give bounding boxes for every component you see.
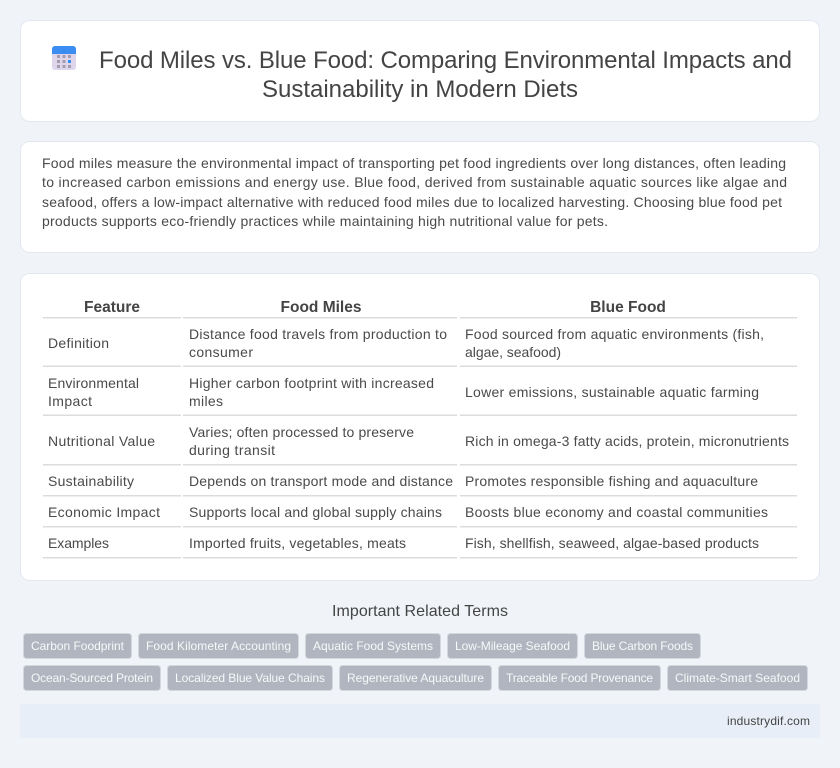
row: sustainability: Sustainability: [48, 473, 134, 489]
row: economic impact: [48, 504, 768, 520]
row: environmental impact: Higher carbon footprint with increased: [189, 375, 434, 391]
row: nutritional value: [48, 424, 789, 458]
row: definition: Food sourced from aquatic environments (fish,: [465, 326, 764, 342]
row: environmental impact: Impact: [48, 393, 92, 409]
tag list: related terms: [24, 634, 808, 690]
row: examples: Imported fruits, vegetables, meats: [189, 535, 406, 551]
tag list: related terms: Ocean-Sourced Protein: [31, 671, 153, 685]
panel: title header: [20, 20, 820, 122]
tag list: related terms: Localized Blue Value Chains: [175, 671, 325, 685]
row: nutritional value: Nutritional Value: [48, 433, 155, 449]
row: environmental impact: [48, 375, 759, 409]
row: nutritional value: during transit: [189, 442, 275, 458]
text block: introduction: to increased carbon emissions and energy use. Blue food, derived from sustainable aquatic sources like algae and: [42, 174, 787, 190]
icon: calendar: [52, 46, 76, 70]
tag list: related terms: Regenerative Aquaculture: [347, 671, 484, 685]
text block: introduction: products supports eco-friendly practices while maintaining high nutritional value for pets.: [42, 213, 608, 229]
tag list: related terms: Climate-Smart Seafood: [675, 671, 800, 685]
row: economic impact: Boosts blue economy and coastal communities: [465, 504, 768, 520]
tag list: related terms: Blue Carbon Foods: [592, 639, 693, 653]
row: environmental impact: Lower emissions, sustainable aquatic farming: [465, 384, 759, 400]
footer bar: [20, 704, 820, 738]
panel: comparison table: [20, 274, 820, 580]
tag list: related terms: Food Kilometer Accounting: [146, 639, 291, 653]
tag list: related terms: Traceable Food Provenance: [506, 671, 653, 685]
row: definition: algae, seafood): [465, 344, 561, 360]
row: examples: [48, 535, 759, 551]
row: definition: Distance food travels from production to: [189, 326, 447, 342]
tag list: related terms: Aquatic Food Systems: [313, 639, 433, 653]
tag list: related terms: Carbon Foodprint: [31, 639, 125, 653]
row: examples: Fish, shellfish, seaweed, algae-based products: [465, 535, 759, 551]
table header: Feature: [84, 299, 140, 316]
panel: introduction: [20, 142, 820, 252]
row: environmental impact: miles: [189, 393, 223, 409]
row: economic impact: Supports local and global supply chains: [189, 504, 442, 520]
table header: [84, 299, 666, 316]
text block: introduction: seafood, offers a low-impact alternative with reduced food miles due to localized harvesting. Choosing blue food pet: [42, 194, 782, 210]
table header: Blue Food: [590, 299, 666, 316]
row: definition: Definition: [48, 335, 109, 351]
title: Food Miles vs. Blue Food: Comparing Environmental Impacts and: [99, 47, 792, 74]
row: definition: consumer: [189, 344, 253, 360]
row: economic impact: Economic Impact: [48, 504, 160, 520]
row: sustainability: [48, 473, 758, 489]
text block: introduction: Food miles measure the environmental impact of transporting pet food ingredients over long distances, often leading: [42, 155, 786, 171]
title: Sustainability in Modern Diets: [262, 76, 578, 103]
row: sustainability: Depends on transport mode and distance: [189, 473, 453, 489]
row: sustainability: Promotes responsible fishing and aquaculture: [465, 473, 758, 489]
row: definition: [48, 326, 764, 360]
heading: related terms: Important Related Terms: [332, 603, 508, 620]
table header: Food Miles: [281, 299, 361, 316]
footer bar: industrydif.com: [727, 714, 810, 728]
row: examples: Examples: [48, 535, 109, 551]
tag list: related terms: Low-Mileage Seafood: [455, 639, 570, 653]
row: nutritional value: Varies; often processed to preserve: [189, 424, 414, 440]
row: nutritional value: Rich in omega-3 fatty acids, protein, micronutrients: [465, 433, 789, 449]
row: environmental impact: Environmental: [48, 375, 139, 391]
